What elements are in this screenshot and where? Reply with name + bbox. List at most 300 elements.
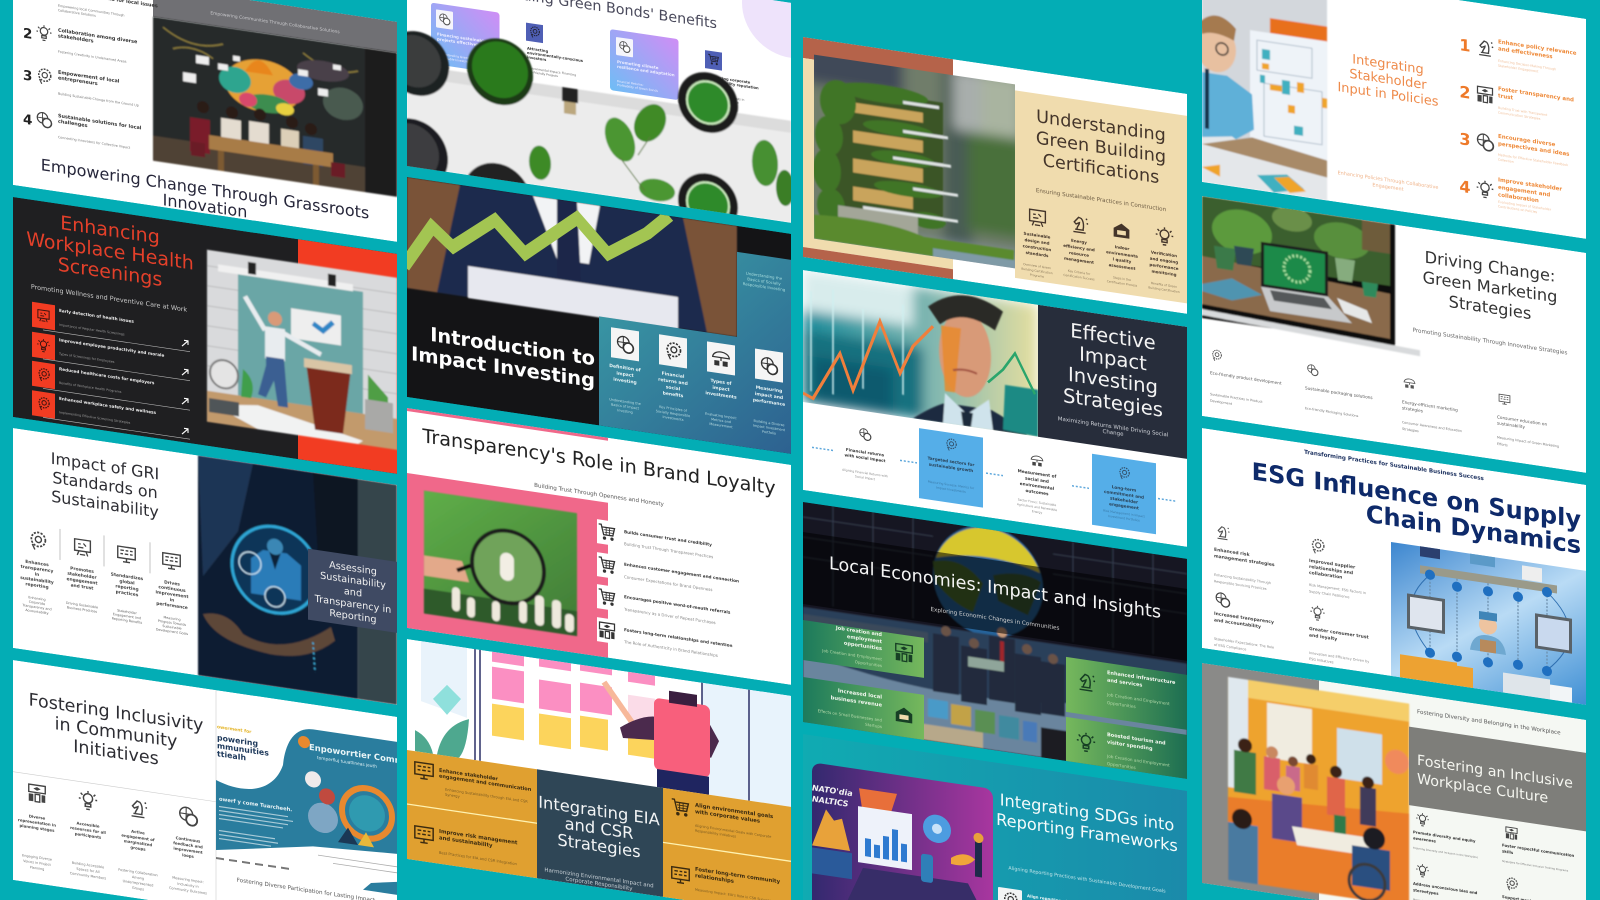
column 3: global xyxy=(119,578,135,587)
column 2: and trust xyxy=(71,582,93,592)
column 1: reporting xyxy=(25,581,49,591)
item 2: Supply Chain Resilience xyxy=(1309,589,1349,599)
column 1: Diverse xyxy=(29,813,46,821)
card 4: Green Bond Issuance xyxy=(707,96,739,105)
column 1 xyxy=(842,426,888,483)
panel: Empowering Change slide xyxy=(13,0,397,244)
card 1: Sustainable Practices in Product xyxy=(1210,392,1263,404)
card 4: Market Growth: Trends in xyxy=(707,92,744,102)
card 3: Promoting climate xyxy=(617,59,659,70)
list: policies xyxy=(1459,34,1577,220)
column 4 xyxy=(1148,225,1180,294)
illustration: person at sticky-note board xyxy=(415,640,791,807)
item 1: Enhance policy relevance xyxy=(1498,39,1577,57)
item 2: Collaboration among diverse xyxy=(58,28,138,45)
title: Certifications xyxy=(1043,151,1159,188)
column 3: Evaluating Impact: xyxy=(705,412,737,420)
column 1: Financial returns xyxy=(846,447,885,458)
column 2: efficiency and xyxy=(1063,243,1095,252)
card 1: projects effectively xyxy=(437,36,481,48)
item 3: 3 xyxy=(23,68,32,85)
photo: trading floor under globe xyxy=(803,499,1187,779)
title: Impact Investing xyxy=(411,342,595,392)
columns xyxy=(609,327,786,437)
illustration: analytics dashboard xyxy=(812,762,993,900)
blue highlight boxes xyxy=(919,428,1156,534)
card 4: Consumer education on xyxy=(1497,414,1547,427)
panel: Local Economies slide xyxy=(803,499,1187,780)
column 1 xyxy=(609,327,641,416)
column 2 xyxy=(66,537,98,614)
item 3: Encourages positive word-of-mouth referrals xyxy=(624,594,731,615)
subtitle: Fostering Diversity and Belonging in the Workplace xyxy=(1417,709,1561,737)
title: Integrating EIA xyxy=(538,793,661,830)
column 4: impact and xyxy=(755,391,783,401)
item 2: Types of Screenings for Employees xyxy=(58,352,115,364)
item 1: awareness xyxy=(1413,835,1437,844)
column 3: outcomes xyxy=(1026,488,1049,496)
item 2: Building Trust with Transparent xyxy=(1498,106,1548,117)
column 4: stakeholder xyxy=(1110,496,1139,505)
item 3 xyxy=(597,584,731,628)
column 1: impact xyxy=(616,371,634,379)
item 2: Communication Strategies xyxy=(1498,111,1541,121)
item 3: Methods for Effective Stakeholder Feedback xyxy=(1498,153,1568,167)
card 4: Measuring Impact of Green Marketing xyxy=(1497,435,1559,449)
subtitle: Promoting Sustainability Through Innovative Strategies xyxy=(1413,328,1567,357)
column 3: Groups xyxy=(132,886,144,892)
card 3: strategies xyxy=(1402,405,1423,413)
column 3: investments xyxy=(705,390,737,401)
item 4: Sustainable solutions for local xyxy=(58,113,142,132)
item 4 xyxy=(1309,605,1369,670)
column 3: impact xyxy=(712,385,730,393)
photo: man with financial charts xyxy=(803,270,1038,437)
column 4: Benefits of Green xyxy=(1151,281,1177,289)
column 1: Overview of Green xyxy=(1023,262,1051,270)
item 4: Innovation and Efficiency Driven by xyxy=(1309,651,1369,664)
card 2 xyxy=(526,23,584,82)
callout: infrastructure: and services xyxy=(1107,678,1142,689)
column 3 xyxy=(111,545,144,625)
item 3: with corporate values xyxy=(695,809,760,825)
subtitle: Exploring Economic Changes in Communities xyxy=(930,607,1060,632)
column 3: Steps in the xyxy=(1113,275,1131,282)
column 4: Investment Portfolios xyxy=(1108,514,1140,523)
callout: tourism xyxy=(1066,717,1187,780)
item 2: Improved supplier xyxy=(1309,558,1356,571)
card 1 xyxy=(1210,349,1282,413)
item 2 xyxy=(1459,81,1574,126)
list: benefits xyxy=(597,519,739,662)
item 2: and sustainability xyxy=(439,835,493,849)
title: Green Building xyxy=(1036,129,1166,168)
column 4: Continuous xyxy=(176,835,201,844)
card 1: Development xyxy=(1210,399,1233,406)
column 2: Community Members xyxy=(70,871,106,881)
title: Reporting Frameworks xyxy=(996,810,1178,855)
item 2 xyxy=(597,552,739,597)
item 4: Contributions on Policies xyxy=(1498,204,1538,214)
callout: job creation xyxy=(803,620,924,678)
photo: magnifying glass over pawns xyxy=(424,491,577,636)
list: benefits xyxy=(1214,524,1369,670)
grey subtitle band: Empowering Communities Through Collaborative Solutions xyxy=(210,10,340,35)
column 2: stakeholder xyxy=(67,571,97,581)
item 1 xyxy=(1214,526,1275,592)
column 3: Agriculture and Renewable xyxy=(1017,502,1057,512)
item 3: Address unconscious bias and xyxy=(1413,881,1478,895)
column 2: benefits xyxy=(663,390,684,399)
column 4: Sustainable xyxy=(162,624,182,631)
title panel: Effective xyxy=(1070,319,1156,355)
item 3: Collection xyxy=(1498,158,1514,164)
column 3: Energy xyxy=(1032,509,1042,515)
callout: local business: Effects on Small Businesses and xyxy=(818,708,882,723)
column 3: Indoor xyxy=(1115,244,1129,251)
item 4: ESG Initiatives xyxy=(1309,657,1334,664)
item 2 xyxy=(24,25,138,63)
column 2: Financial xyxy=(662,371,685,380)
card 4 xyxy=(705,50,759,108)
item 3: Increased transparency xyxy=(1214,611,1274,626)
column 1: Programs xyxy=(1030,273,1044,279)
title: Integrating SDGs into xyxy=(1000,790,1174,835)
item 2: trust xyxy=(1498,93,1513,102)
item 4 xyxy=(672,863,781,900)
column 2: resource xyxy=(1069,250,1089,258)
item 2: Best Practices for EIA and CSR Integration xyxy=(439,851,517,866)
column 2: returns and xyxy=(658,377,688,387)
item 1: Enhanced risk xyxy=(1214,547,1251,558)
column 1 xyxy=(18,782,56,873)
photo: team around table under colourful map xyxy=(153,17,397,197)
callout: local business: Increased local xyxy=(838,688,882,701)
item 3 xyxy=(1459,128,1570,172)
subtitle: Engagement xyxy=(1372,182,1404,193)
item 4 xyxy=(1459,172,1562,218)
panel: Green Building Certifications slide xyxy=(803,37,1187,314)
item 4: Improve stakeholder xyxy=(1498,177,1562,193)
column 1: Planning xyxy=(30,865,44,871)
column 3: Measurement xyxy=(709,422,733,429)
column 3: Sector Focus: Sustainable xyxy=(1018,498,1056,507)
illustration: analytics dashboard: NATO'dia xyxy=(812,783,853,798)
column 4: Measuring Impact: xyxy=(172,876,204,884)
item 4: Implementing Effective Screening Strategies xyxy=(59,410,131,425)
column 1: construction xyxy=(1023,243,1051,252)
title: Local Economies: Impact and Insights xyxy=(829,554,1161,623)
illustration: analytics dashboard: NALTICS xyxy=(812,794,849,809)
card 3: Financial Returns: xyxy=(617,79,643,87)
card 3: Energy-efficient marketing xyxy=(1402,399,1458,413)
column 2: Accessible xyxy=(77,820,100,829)
item 3: and accountability xyxy=(1214,617,1261,630)
column 1: design and xyxy=(1024,237,1050,246)
column 1: Sustainable xyxy=(1024,231,1051,240)
photo: suit with rising chart xyxy=(407,177,737,338)
column 1: Definition of xyxy=(609,363,641,374)
column 4: Impact Investment xyxy=(753,424,786,432)
list: practices xyxy=(1413,812,1575,900)
photo: laptop among plants xyxy=(1202,194,1420,356)
item 1: Enhance stakeholder xyxy=(439,768,498,783)
flyer image: owerf y come Tuarcheeh. xyxy=(219,797,292,813)
list: benefits xyxy=(32,302,190,439)
title panel xyxy=(1038,305,1187,459)
column 1: standards xyxy=(1026,250,1049,258)
item 3 xyxy=(1413,863,1478,900)
item 3 xyxy=(32,361,190,410)
label panel: Assessing xyxy=(329,560,377,578)
column 2 xyxy=(1063,215,1095,282)
title: Green Marketing xyxy=(1423,268,1557,307)
item 4: relationships xyxy=(695,873,734,885)
column 1 xyxy=(1021,208,1053,280)
column 3: Active xyxy=(131,829,145,836)
column 4: Long-term xyxy=(1112,484,1137,493)
title: ESG Influence on Supply xyxy=(1252,457,1581,534)
panel: Impact Investing slide xyxy=(404,177,791,454)
column 3: Types of xyxy=(711,378,732,387)
column 2: resources for all xyxy=(70,825,107,835)
flyer image: owerment for xyxy=(217,724,252,735)
item 1: Building Trust Through Transparent Practices xyxy=(624,541,713,559)
column 4: and ongoing xyxy=(1150,256,1178,265)
column 4: Risk Management in Impact xyxy=(1103,508,1146,519)
item 2: 2 xyxy=(1459,82,1471,103)
item 1: Synergy xyxy=(445,793,461,799)
column 3: Engagement and xyxy=(113,612,141,620)
list: left xyxy=(415,762,532,868)
title: Chain Dynamics xyxy=(1366,500,1581,560)
item 3: perspectives and ideas xyxy=(1498,141,1570,158)
columns xyxy=(842,423,1146,530)
item 3: Empowerment of local xyxy=(58,70,120,85)
item 2 xyxy=(415,825,518,866)
item 3: Responsibility Initiatives xyxy=(695,829,736,839)
item 3: Stakeholder Expectations: The Role xyxy=(1214,637,1274,650)
column 3: Underrepresented xyxy=(123,879,153,888)
item 2: Fostering Creativity in Underserved Areas xyxy=(58,50,127,64)
subtitle: Aligning Reporting Practices with Sustainable Development Goals xyxy=(1008,865,1166,895)
kicker: Transforming Practices for Sustainable Business Success xyxy=(1304,450,1485,482)
item 1 xyxy=(1413,812,1478,859)
panel: Workplace Health Screenings slide xyxy=(13,197,397,474)
column 3: Certification Process xyxy=(1107,279,1138,288)
flyer image: mmunuities xyxy=(217,741,269,758)
photo: figure holding glowing scales hologram xyxy=(198,455,397,705)
title: Impact of GRI xyxy=(51,449,159,484)
column 4: performance xyxy=(1149,262,1179,271)
item 3: Encourage diverse xyxy=(1498,134,1556,148)
card 4: sustainability xyxy=(1497,420,1525,430)
column 4: monitoring xyxy=(1151,268,1177,277)
column 1: Social Impact xyxy=(855,474,876,481)
title: Stakeholder xyxy=(1349,67,1427,93)
photo: man stretching with drink xyxy=(207,250,397,450)
column 1: Understanding the xyxy=(609,397,641,406)
title panel: Change xyxy=(1102,429,1124,438)
column 4: Community Outcomes xyxy=(169,886,207,896)
card 1: Financing sustainable xyxy=(437,31,487,44)
column 2: management xyxy=(1064,256,1094,265)
column 2: Building Accessible xyxy=(72,861,104,870)
photo: leaves and solar discs on white wall xyxy=(376,20,794,275)
callout: job creation: opportunities xyxy=(844,641,882,652)
item 4: engagement and xyxy=(1498,185,1550,199)
column 3: engagement of xyxy=(121,832,155,842)
teal panels: Understanding the xyxy=(746,271,783,281)
list: right xyxy=(672,799,781,900)
item 1: Importance of Regular Health Screenings xyxy=(59,323,125,337)
column 3: practices xyxy=(116,589,139,598)
item 2: Foster respectful communication xyxy=(1502,842,1575,858)
column 1: Basics of Impact xyxy=(611,403,640,411)
flyer image: ttieaIh xyxy=(217,749,246,762)
column 4: Portfolio xyxy=(762,430,776,436)
title band: Workplace Culture xyxy=(1417,771,1548,807)
item 4: The Role of Authenticity in Brand Relationships xyxy=(623,639,718,658)
panel: ESG Supply Chain slide xyxy=(1202,428,1586,705)
column 4: Building Certification xyxy=(1148,285,1180,294)
card 2: environmentally-conscious xyxy=(527,51,584,63)
column 4: performance xyxy=(753,397,785,408)
column 1: Aligning Financial Returns with xyxy=(842,468,888,478)
card 2: Eco-Friendly Projects xyxy=(527,70,558,78)
card 4: Enhancing corporate xyxy=(707,74,751,85)
column 4: commitment and xyxy=(1104,489,1144,500)
teal panels xyxy=(599,231,791,454)
card 4 xyxy=(1497,394,1559,455)
column 4 xyxy=(169,805,207,896)
card 3: resilience and adaptation xyxy=(617,64,675,77)
column 1: Accountability xyxy=(25,608,49,615)
item 1: engagement and communication xyxy=(439,773,532,793)
list: numbered items: Empowering local Communities Through xyxy=(58,4,125,18)
column 4: Measuring xyxy=(163,615,181,622)
title: Standards on xyxy=(52,468,158,502)
item 4: Evaluating Impact of Stakeholder xyxy=(1498,200,1552,212)
column 4: feedback and xyxy=(173,840,203,850)
title: Empowering Change Through Grassroots xyxy=(41,155,369,223)
card 1: Sustainable Investment Option xyxy=(437,55,483,66)
callout: tourism: Job Creation and Employment xyxy=(1106,753,1170,768)
column 3: environmenta xyxy=(1106,249,1138,259)
column 1: with social impact xyxy=(845,452,886,463)
column 1: Corporate xyxy=(29,600,45,606)
column 1: sustainability xyxy=(20,575,54,586)
column 4: performance xyxy=(156,601,188,611)
card 3: Consumer Awareness and Education xyxy=(1402,420,1462,433)
panel: GRI Standards slide xyxy=(13,428,397,705)
column 4 xyxy=(753,348,786,437)
label panel: Transparency in xyxy=(314,594,391,616)
item 3 xyxy=(1214,592,1274,656)
column 3: social and xyxy=(1025,475,1049,484)
teal panels: Basics of Socially xyxy=(747,276,781,286)
column 4: Inclusivity in xyxy=(177,882,199,889)
photo: green building model xyxy=(803,37,1033,286)
item 1 xyxy=(1459,34,1577,79)
column 2: Business Practices xyxy=(67,605,97,614)
column 3: environmental xyxy=(1020,481,1055,491)
column 1: Voices in Project xyxy=(23,859,51,867)
column 2 xyxy=(928,436,975,495)
column 4 xyxy=(156,552,188,636)
callout: job creation: Job Creation and Employment xyxy=(821,648,882,662)
item 2: Improve risk management xyxy=(439,829,518,846)
dark title band xyxy=(803,532,1187,661)
column 2 xyxy=(656,334,690,423)
column 2: Key Principles of xyxy=(659,405,688,413)
column 2: engagement xyxy=(66,576,98,587)
title panel: Investing xyxy=(1068,363,1158,399)
callout: tourism: visitor spending xyxy=(1107,740,1153,752)
item 2 xyxy=(1309,538,1366,602)
item 1: and effectiveness xyxy=(1498,46,1553,60)
title panel: Maximizing Returns While Driving Social xyxy=(1058,416,1169,439)
card 2: Sustainable packaging solutions xyxy=(1305,385,1373,400)
item 3: Aligning Environmental Goals with Corporate xyxy=(695,824,771,839)
item 1: management strategies xyxy=(1214,553,1275,568)
column 4: Verification xyxy=(1151,250,1177,258)
title band xyxy=(1409,727,1586,831)
subtitle: Building Trust Through Openness and Honesty xyxy=(534,483,664,508)
columns xyxy=(18,781,207,900)
title: Initiatives xyxy=(73,737,159,770)
column 3: Standardizes xyxy=(111,571,144,582)
card 3: Strategies xyxy=(1402,427,1419,433)
column 2: Key Criteria for xyxy=(1068,269,1091,276)
card 3 xyxy=(610,29,678,100)
item 1: Stakeholder Engagement xyxy=(1498,64,1539,74)
card 4: sustainability reputation xyxy=(707,79,759,90)
panel: Effective Impact Investing slide xyxy=(803,270,1187,547)
title panel: Impact xyxy=(1079,342,1147,375)
item 3: Align environmental goals xyxy=(695,803,773,820)
panel: SDGs in Reporting slide xyxy=(803,734,1187,900)
title: Screenings xyxy=(58,253,162,291)
title: Strategies xyxy=(1449,292,1531,323)
column 1: Investing xyxy=(617,408,633,415)
item 3 xyxy=(672,799,773,844)
item 1: Enhancing Decision-Making Through xyxy=(1498,59,1556,71)
column 2: Driving Sustainable xyxy=(66,601,98,610)
title: Fostering Inclusivity xyxy=(29,690,203,736)
card 1: Eco-friendly product development xyxy=(1210,370,1282,386)
item 3: Transparency as a Driver of Repeat Purchases xyxy=(623,606,716,625)
panel: Inclusive Workplace slide xyxy=(1202,663,1586,900)
column 4: Progress Towards xyxy=(158,619,186,627)
item 2 xyxy=(32,332,190,381)
column 4: loops xyxy=(182,852,195,859)
subtitle: Enhancing Policies Through Collaborative xyxy=(1338,170,1438,191)
item 2: Improved employee productivity and morale xyxy=(59,337,164,358)
item 2: Foster transparency and xyxy=(1498,86,1574,104)
column 3: Fostering Collaboration xyxy=(118,868,158,877)
panel: Green Marketing slide xyxy=(1202,194,1586,473)
column 2: social xyxy=(666,384,681,392)
column 3: l quality xyxy=(1113,256,1132,264)
column 3: Among xyxy=(132,875,144,881)
cards row xyxy=(1210,349,1559,455)
column 3 xyxy=(118,798,158,894)
callout: infrastructure: Opportunities xyxy=(1107,700,1136,709)
label panel: Reporting xyxy=(329,608,377,626)
column 4: Measuring xyxy=(756,385,782,395)
list: numbered items xyxy=(23,0,158,154)
